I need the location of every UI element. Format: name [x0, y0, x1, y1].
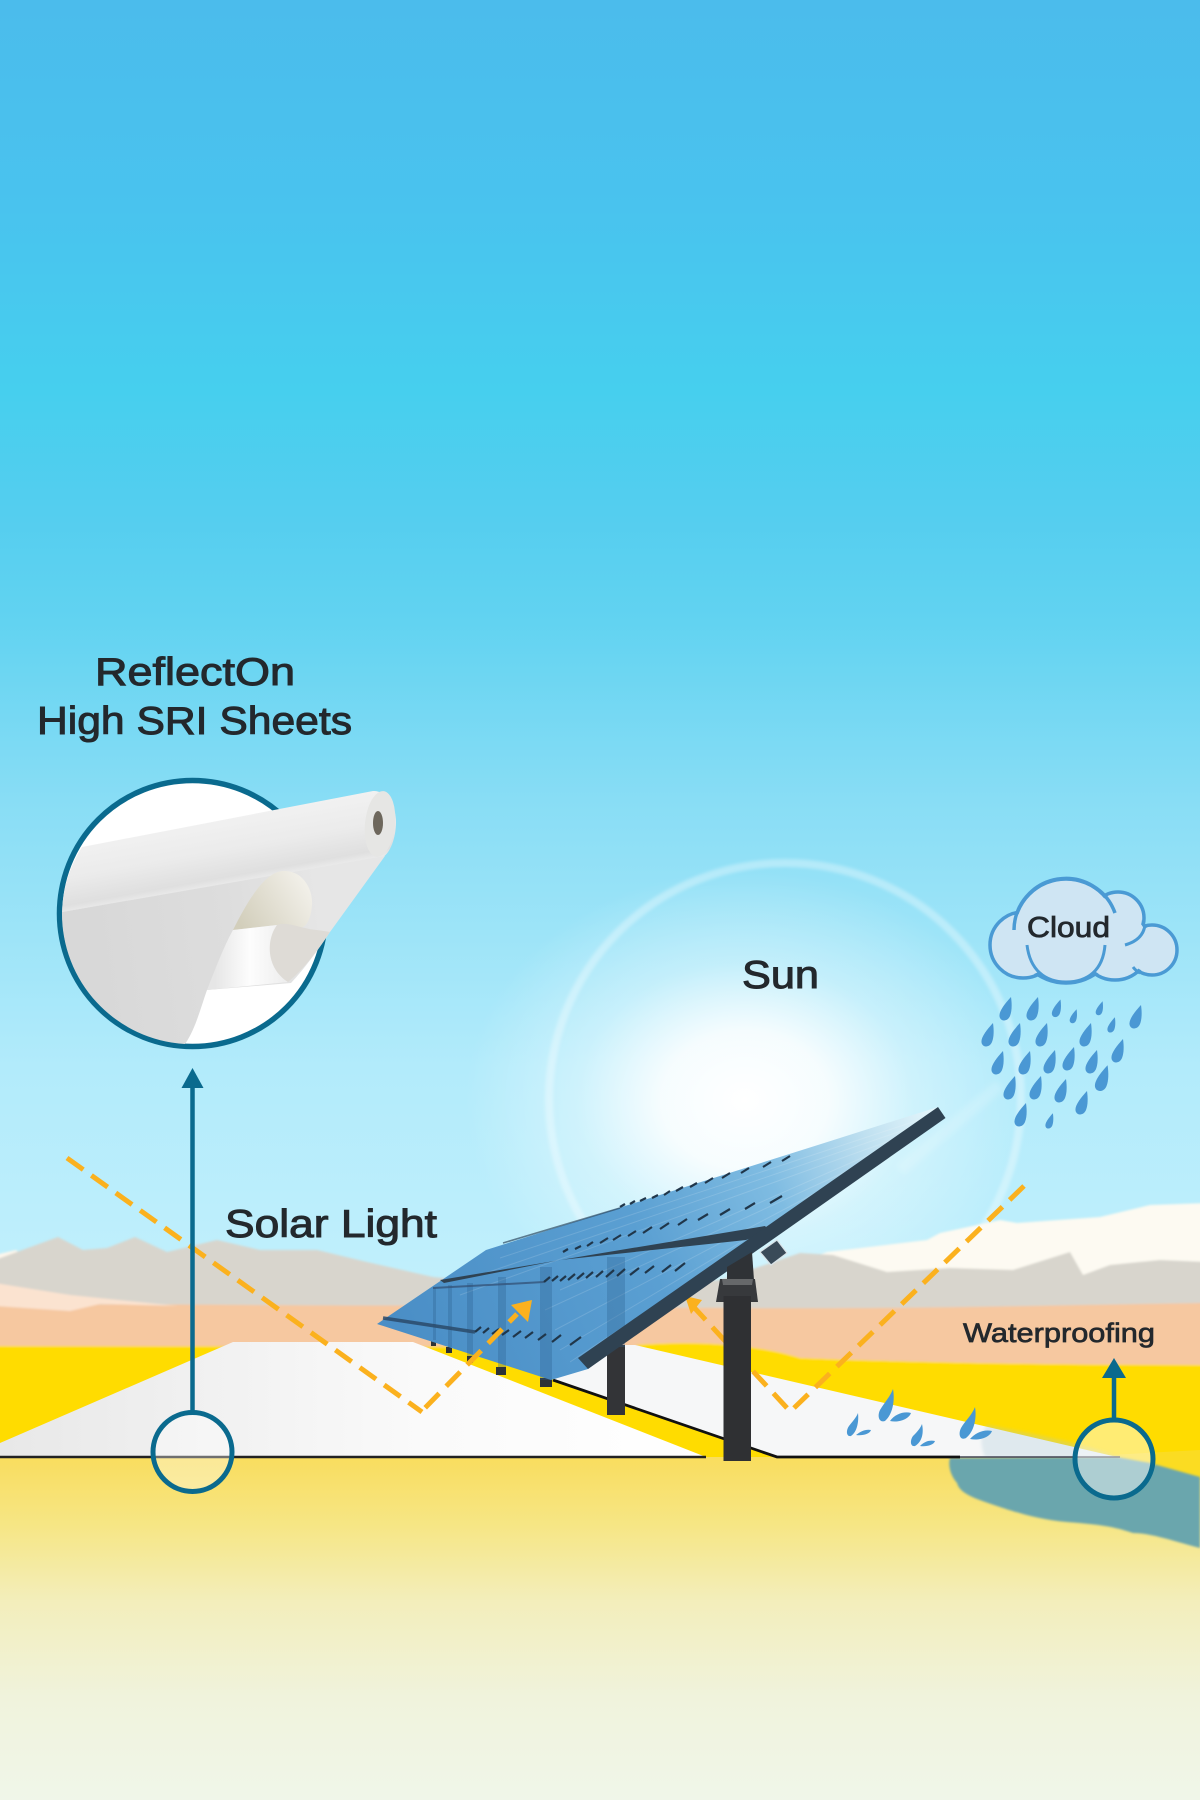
- circle frame: [60, 780, 326, 1046]
- panel rails: [383, 1208, 770, 1332]
- splash 2: [879, 1389, 911, 1422]
- sheet curl inner: [233, 871, 312, 930]
- arrow head: ray to panel: [511, 1300, 532, 1322]
- post: rear support feet: [431, 1340, 552, 1387]
- sky background: [0, 0, 1200, 1300]
- splash 3: [911, 1424, 935, 1446]
- label: Waterproofing: Waterproofing: [963, 1318, 1155, 1348]
- post: main pole: [716, 1252, 758, 1461]
- water splash drops: [847, 1389, 992, 1446]
- right white platform: [553, 1345, 1117, 1457]
- desert landscape: [0, 1203, 1200, 1480]
- dashed solar light ray, incoming and reflected behind posts: [67, 1158, 1024, 1412]
- label: Cloud: Cloud: [1027, 912, 1110, 944]
- unrolled sheet: [62, 856, 385, 1044]
- label: Solar Light: Solar Light: [225, 1203, 437, 1246]
- splash 4: [960, 1407, 992, 1440]
- yellow wedge right of waterproofing marker: [1110, 1450, 1200, 1480]
- heading: ReflectOn High SRI Sheets: ReflectOn: [95, 651, 295, 694]
- sun glow and halo: [465, 863, 1025, 1335]
- sheet curl end: [270, 924, 330, 982]
- roll core hole: [373, 811, 383, 835]
- solar panel array: [377, 1107, 946, 1461]
- arrow head: reflected ray to panel underside: [685, 1296, 702, 1314]
- marker: sheet location with arrow up: [153, 1068, 232, 1492]
- ground edge lines: [0, 1380, 1120, 1457]
- panel translucent supports: [433, 1257, 625, 1380]
- label: Sun: Sun: [742, 954, 819, 997]
- heading: ReflectOn High SRI Sheets: High SRI Sheets: [37, 700, 352, 743]
- ground foreground: [0, 1457, 1200, 1800]
- post: middle support: [607, 1345, 625, 1415]
- icon: cloud: [990, 878, 1177, 983]
- roll body: [62, 791, 396, 912]
- panel cell lines: [460, 1118, 925, 1362]
- left white platform: [0, 1342, 706, 1457]
- icon: rain drops: [981, 997, 1142, 1129]
- sheet curl tube: [207, 925, 288, 990]
- panel dark front frame: [578, 1107, 946, 1369]
- panel surface: [377, 1107, 938, 1380]
- water shadow area: [949, 1425, 1200, 1548]
- panel cell dash marks: [475, 1156, 790, 1345]
- marker: waterproofing location with arrow up: [1075, 1358, 1153, 1498]
- splash 1: [847, 1413, 871, 1436]
- roll end cap: [362, 790, 398, 858]
- bracket box: [760, 1240, 787, 1265]
- callout: sheet detail circle: [60, 780, 398, 1046]
- heading: ReflectOn High SRI Sheets: [37, 651, 352, 743]
- reflected dashed ray over panel: [421, 1314, 517, 1412]
